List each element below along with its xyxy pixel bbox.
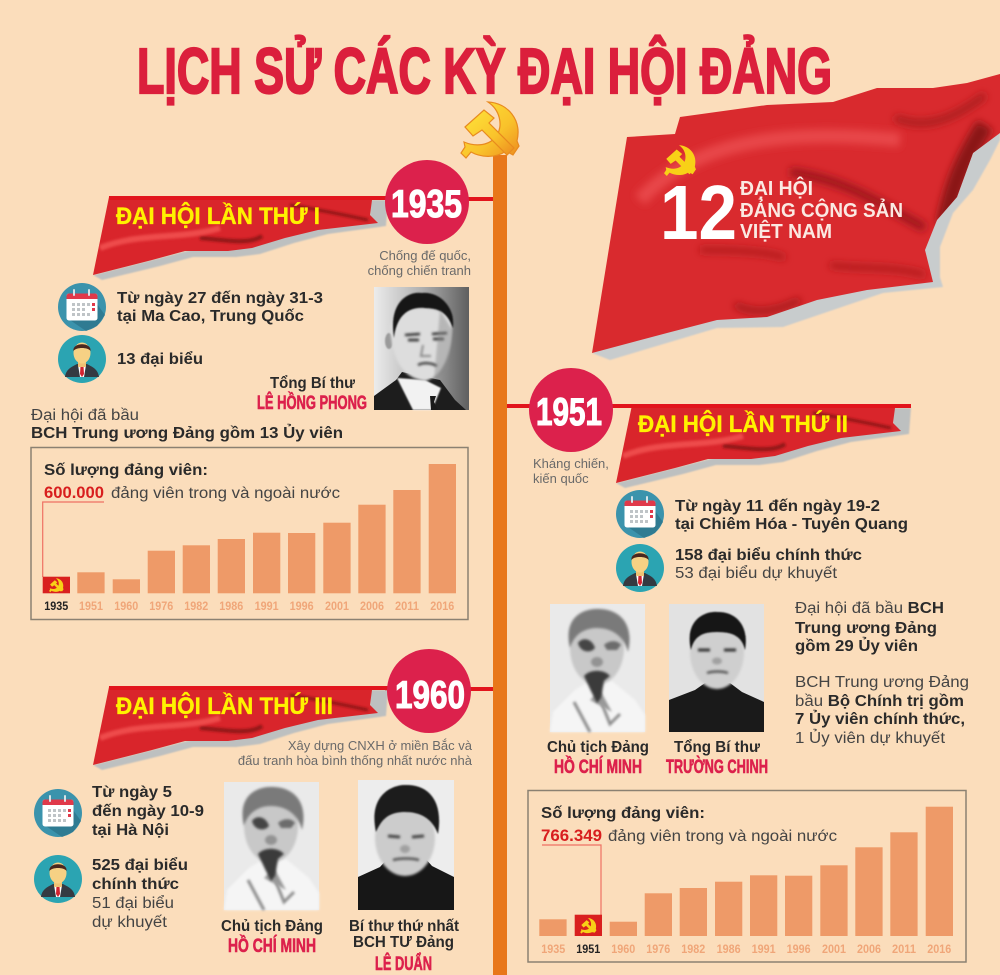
election text: gồm 29 Ủy viên (795, 637, 918, 655)
leader caption: Trường Chinh: TRƯỜNG CHINH (666, 756, 768, 778)
delegates (92, 857, 188, 931)
delegates: 525 đại biểu (92, 857, 188, 874)
banner: ĐẠI HỘI LẦN THỨ II (638, 410, 848, 438)
delegates: dự khuyết (92, 914, 168, 931)
banner (93, 196, 388, 280)
bar chart: party members 1951: Số lượng đảng viên: (541, 805, 705, 822)
leader caption: Lê Duẩn: LÊ DUẨN (375, 953, 432, 975)
year badge (387, 649, 471, 733)
flag caption: ĐẢNG CỘNG SẢN (740, 198, 903, 222)
theme text: đấu tranh hòa bình thống nhất nước nhà (238, 753, 473, 768)
bar chart: party members 1935: 1991 (255, 599, 279, 613)
flag body (592, 74, 1000, 353)
bar chart: party members 1951: 1976 (646, 942, 671, 956)
leader caption: Trường Chinh: Tổng Bí thư (674, 739, 761, 756)
icon: delegate (58, 335, 106, 383)
election text: Trung ương Đảng (795, 620, 937, 637)
bar chart: party members 1935: 1996 (290, 599, 314, 613)
delegates: 158 đại biểu chính thức (675, 547, 862, 564)
election text: BCH Trung ương Đảng (795, 674, 969, 691)
bar chart: party members 1951: 2006 (857, 942, 881, 956)
leader caption: Tổng Bí thư (270, 375, 356, 392)
date and place (117, 290, 323, 325)
leader caption: LÊ HỒNG PHONG (257, 392, 367, 414)
portrait: Lê Hồng Phong (374, 287, 469, 410)
portrait: Hồ Chí Minh (224, 782, 319, 910)
banner (93, 686, 388, 770)
leader caption: Trường Chinh (666, 739, 768, 778)
flag folds (640, 95, 985, 311)
bar chart: party members 1935: Số lượng đảng viên: (44, 462, 208, 479)
theme text: Xây dựng CNXH ở miền Bắc và (288, 738, 473, 753)
bar chart: party members 1951: 1951 (576, 942, 601, 956)
icon: delegate (34, 855, 82, 903)
bar chart: party members 1935: 1982 (184, 599, 209, 613)
leader caption: Lê Duẩn (349, 918, 459, 975)
year badge (529, 368, 613, 452)
bar chart: party members 1935: 2016 (430, 599, 455, 613)
leader caption: Lê Duẩn: BCH TƯ Đảng (353, 934, 454, 951)
year badge: 1951 (536, 391, 602, 434)
icon: calendar (58, 283, 106, 331)
date and place: tại Chiêm Hóa - Tuyên Quang (675, 516, 908, 533)
panel: red flag summary (592, 74, 1000, 360)
election text: Đại hội đã bầu BCH (795, 600, 944, 617)
flag caption: ĐẠI HỘI (740, 176, 813, 200)
bar chart: party members 1951: 1986 (717, 942, 741, 956)
portrait: Lê Duẩn (358, 780, 454, 910)
election text: bầu Bộ Chính trị gồm (795, 693, 964, 710)
bar chart: party members 1935: 1960 (114, 599, 139, 613)
panel: congress I, 1935 (31, 160, 493, 620)
connector line (385, 687, 493, 691)
date and place (675, 498, 908, 533)
election text (31, 407, 343, 442)
leader caption: Hồ Chí Minh: Chủ tịch Đảng (221, 918, 323, 935)
leader caption (257, 375, 367, 414)
flag number: 12 (660, 170, 737, 256)
bar chart: party members 1935: 2006 (360, 599, 384, 613)
date and place (92, 784, 204, 839)
theme text: Kháng chiến, (533, 456, 609, 471)
bar chart: party members 1951: 2011 (892, 942, 916, 956)
timeline pole (493, 155, 507, 975)
icon: flag hammer and sickle (664, 145, 696, 176)
banner (610, 404, 911, 488)
year badge: 1960 (395, 674, 465, 717)
leader caption: Hồ Chí Minh (547, 739, 649, 778)
election text (795, 600, 969, 747)
delegates: 13 đại biểu (117, 351, 203, 368)
leader caption: Hồ Chí Minh: HỒ CHÍ MINH (554, 756, 642, 778)
bar chart: party members 1935: 2011 (395, 599, 419, 613)
theme text: Chống đế quốc, (379, 248, 471, 263)
date and place: Từ ngày 27 đến ngày 31-3 (117, 290, 323, 307)
year badge (385, 160, 469, 244)
banner: ĐẠI HỘI LẦN THỨ I (116, 202, 320, 230)
bar chart: party members 1951: 1982 (681, 942, 706, 956)
bar chart: party members 1935 (31, 448, 468, 620)
bar chart: party members 1951: 766.349 (541, 827, 602, 845)
bar chart: party members 1935: 600.000 (44, 484, 104, 502)
panel: congress II, 1951 (507, 368, 969, 962)
portrait: Trường Chinh (669, 604, 764, 732)
bar chart: party members 1951: 2016 (927, 942, 952, 956)
flag caption (740, 176, 903, 243)
bar chart: party members 1951: 1996 (787, 942, 811, 956)
flag caption: VIỆT NAM (740, 219, 832, 243)
banner: ĐẠI HỘI LẦN THỨ III (116, 692, 333, 720)
icon: calendar (34, 789, 82, 837)
year badge: 1935 (391, 183, 462, 226)
theme text: chống chiến tranh (368, 263, 471, 278)
leader caption: Hồ Chí Minh: HỒ CHÍ MINH (228, 935, 316, 957)
portrait: Hồ Chí Minh (550, 604, 645, 732)
election text: Đại hội đã bầu (31, 407, 139, 424)
bar chart: party members 1951: 2001 (822, 942, 846, 956)
date and place: tại Ma Cao, Trung Quốc (117, 308, 304, 325)
delegates: chính thức (92, 876, 179, 893)
date and place: đến ngày 10-9 (92, 803, 204, 820)
delegates: 51 đại biểu (92, 895, 174, 912)
theme text: kiến quốc (533, 471, 589, 486)
bar chart: party members 1951 (528, 790, 966, 962)
election text: 7 Ủy viên chính thức, (795, 710, 965, 728)
leader caption: Hồ Chí Minh: Chủ tịch Đảng (547, 739, 649, 756)
bar chart: party members 1951: đảng viên trong và ngoài nước (608, 828, 837, 845)
bar chart: party members 1935: 1935 (44, 599, 69, 613)
delegates: 53 đại biểu dự khuyết (675, 565, 838, 582)
bar chart: party members 1935: đảng viên trong và ngoài nước (111, 485, 340, 502)
date and place: Từ ngày 5 (92, 784, 172, 801)
date and place: Từ ngày 11 đến ngày 19-2 (675, 498, 880, 515)
connector line (385, 197, 493, 201)
bar chart: party members 1951: 1960 (611, 942, 636, 956)
bar chart: party members 1935: 1951 (79, 599, 103, 613)
bar chart: party members 1935: 1976 (149, 599, 174, 613)
theme text (368, 248, 471, 278)
bar chart: party members 1935: 1986 (219, 599, 244, 613)
delegates (675, 547, 862, 582)
election text: BCH Trung ương Đảng gồm 13 Ủy viên (31, 424, 343, 442)
panel: congress III, 1960 (34, 649, 493, 975)
leader caption: Lê Duẩn: Bí thư thứ nhất (349, 918, 459, 935)
bar chart: party members 1951: 1991 (752, 942, 776, 956)
bar chart: party members 1935: 2001 (325, 599, 349, 613)
icon: calendar (616, 490, 664, 538)
theme text (533, 456, 609, 486)
connector line (507, 404, 537, 408)
bar chart: party members 1951: 1935 (541, 942, 566, 956)
leader caption: Hồ Chí Minh (221, 918, 323, 957)
icon: delegate (616, 544, 664, 592)
icon: gold hammer and sickle emblem (461, 102, 519, 158)
theme text (238, 738, 473, 768)
flag shadow (592, 128, 1000, 360)
election text: 1 Ủy viên dự khuyết (795, 729, 946, 747)
date and place: tại Hà Nội (92, 822, 169, 839)
